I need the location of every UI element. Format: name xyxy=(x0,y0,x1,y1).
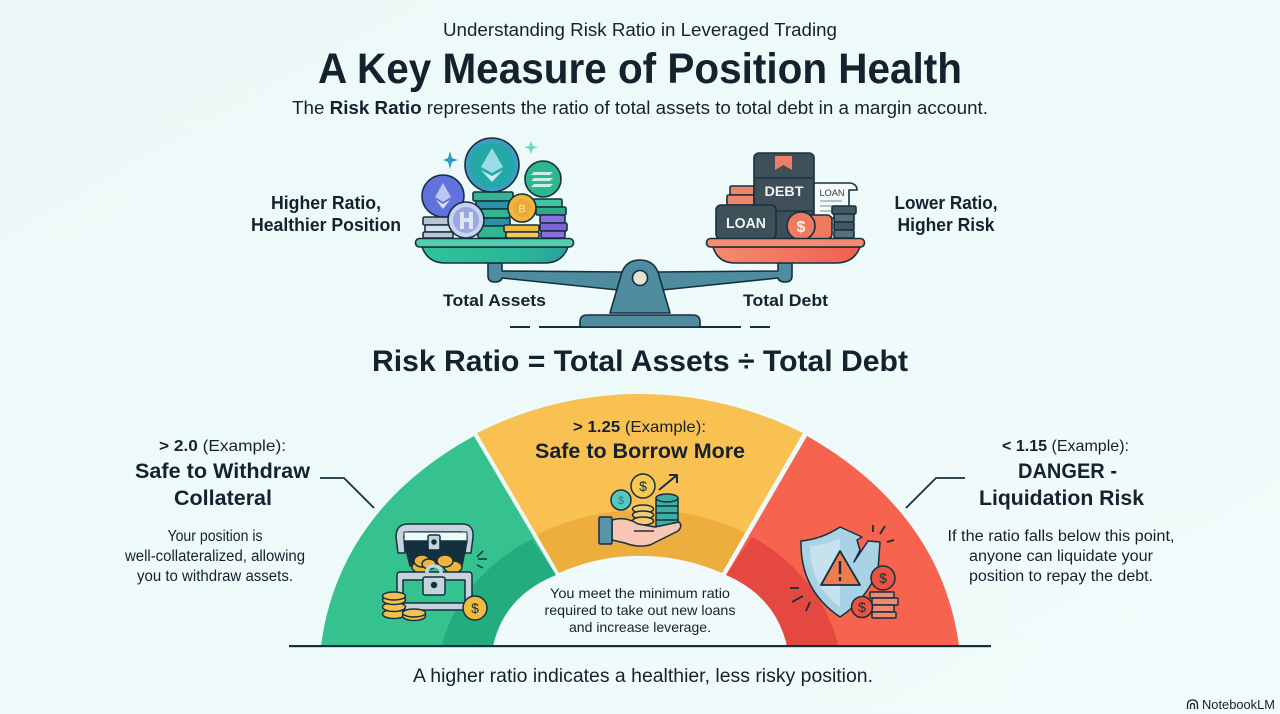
red wallet xyxy=(798,215,832,239)
side label: lower ratio: Lower Ratio, xyxy=(894,193,998,213)
icon: hand holding coins: $ xyxy=(639,478,647,494)
side label: higher ratio xyxy=(251,193,401,235)
callout leader xyxy=(320,478,374,508)
coin: silver xyxy=(448,202,484,238)
right pan xyxy=(706,238,864,263)
left pan xyxy=(416,238,574,263)
coin: teal ethereum xyxy=(465,138,519,192)
side label: lower ratio: Higher Risk xyxy=(898,215,995,235)
NotebookLM badge xyxy=(1188,698,1275,712)
title: A Key Measure of Position Health xyxy=(318,45,962,93)
side label: higher ratio: Healthier Position xyxy=(251,215,401,235)
loan document: LOAN xyxy=(820,188,845,199)
tier name: Safe to Withdraw xyxy=(135,460,311,483)
gauge segment: red xyxy=(726,436,959,646)
description: borrow tier: required to take out new loans xyxy=(544,602,736,618)
coin: blue ethereum xyxy=(422,175,464,217)
tier name xyxy=(135,460,311,510)
description: anyone can liquidate your xyxy=(969,548,1153,565)
heading: borrow tier: > 1.25 (Example): xyxy=(573,419,706,436)
description xyxy=(124,528,305,585)
left pan: crypto assets xyxy=(416,138,574,263)
sparkles xyxy=(443,141,538,169)
callout leader xyxy=(906,478,965,508)
gauge xyxy=(289,394,991,647)
label: total assets: Total Assets xyxy=(443,291,546,310)
icon: cracked shield warning xyxy=(790,525,898,618)
gauge segment: green xyxy=(321,436,556,646)
definition text: The Risk Ratio represents the ratio of total assets to total debt in a margin account. xyxy=(292,97,988,118)
heading: > 2.0 (Example): xyxy=(159,438,286,455)
balance scale illustration xyxy=(416,138,864,327)
callout: danger tier xyxy=(906,438,1174,585)
side label: higher ratio: Higher Ratio, xyxy=(271,193,381,213)
description: Your position is xyxy=(168,528,263,545)
description: position to repay the debt. xyxy=(969,568,1153,585)
icon: cracked shield warning: $ xyxy=(879,570,887,586)
coin stacks xyxy=(423,192,567,238)
dollar coin xyxy=(787,212,815,240)
ground line xyxy=(510,326,770,328)
description: you to withdraw assets. xyxy=(137,568,293,585)
side label: lower ratio xyxy=(894,193,998,235)
icon: hand holding coins xyxy=(599,474,681,546)
coin: solana xyxy=(525,161,561,197)
loan document xyxy=(814,183,857,218)
gauge baseline xyxy=(289,645,991,647)
description: borrow tier xyxy=(544,585,736,635)
coin: gold bitcoin xyxy=(508,194,536,222)
icon: treasure chest: $ xyxy=(471,600,479,616)
gauge segment: yellow xyxy=(477,394,803,573)
description: well-collateralized, allowing xyxy=(124,548,305,565)
loan box: LOAN xyxy=(726,216,766,232)
label: total debt: Total Debt xyxy=(743,291,828,310)
tier name: DANGER - xyxy=(1018,460,1117,483)
coin: gold bitcoin: B xyxy=(518,204,526,216)
footer note: A higher ratio indicates a healthier, less risky position. xyxy=(413,666,873,687)
right pan: debt and loans xyxy=(706,153,864,263)
red stacked books xyxy=(727,186,754,205)
description xyxy=(948,528,1174,585)
wordmark: NotebookLM xyxy=(1202,698,1275,712)
callout: withdraw tier xyxy=(124,438,374,585)
heading: borrow tier: Safe to Borrow More xyxy=(535,440,745,463)
eyebrow heading: Understanding Risk Ratio in Leveraged Trading xyxy=(443,20,837,40)
icon: notebook mark xyxy=(1188,700,1198,709)
dollar coin: $ xyxy=(797,219,806,236)
dark stack xyxy=(832,206,856,238)
tier name: Collateral xyxy=(174,487,272,510)
heading: borrow tier xyxy=(535,419,745,463)
loan box xyxy=(716,205,776,239)
icon: cracked shield warning: $ xyxy=(858,599,866,615)
description: borrow tier: You meet the minimum ratio xyxy=(550,585,730,601)
heading: < 1.15 (Example): xyxy=(1002,438,1129,455)
description: If the ratio falls below this point, xyxy=(948,528,1174,545)
tier name xyxy=(979,460,1144,510)
icon: treasure chest xyxy=(382,524,487,620)
tier name: Liquidation Risk xyxy=(979,487,1144,510)
description: borrow tier: and increase leverage. xyxy=(569,619,711,635)
icon: hand holding coins: $ xyxy=(618,495,624,507)
debt book xyxy=(754,153,814,239)
formula: Risk Ratio = Total Assets ÷ Total Debt xyxy=(372,345,908,378)
debt book: DEBT xyxy=(764,184,804,199)
scale beam and pivot xyxy=(488,260,792,327)
